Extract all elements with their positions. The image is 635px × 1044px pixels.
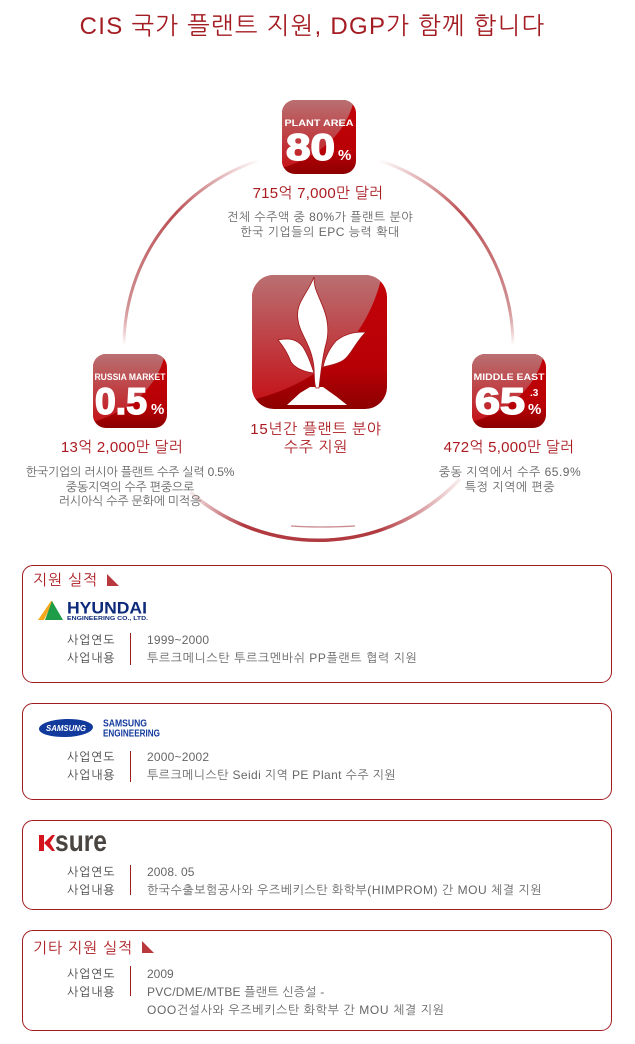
center caption: 15년간 플랜트 분야 bbox=[250, 421, 382, 438]
value: content: PVC/DME/MTBE 플랜트 신증설 - bbox=[147, 985, 324, 999]
value: year: 2009 bbox=[147, 967, 174, 981]
icon: middle east 65.3% badge: MIDDLE EAST bbox=[474, 372, 545, 382]
icon: middle east 65.3% badge: 65 bbox=[475, 381, 525, 422]
value: year: 2008. 05 bbox=[147, 865, 195, 879]
label: business content: 사업내용 bbox=[67, 651, 115, 665]
title: CIS 국가 플랜트 지원, DGP가 함께 합니다 bbox=[80, 13, 545, 40]
icon: russia market 0.5% badge: RUSSIA MARKET bbox=[94, 372, 166, 382]
logo: samsung: SAMSUNG bbox=[46, 724, 86, 733]
description: middle east: 특정 지역에 편중 bbox=[465, 480, 555, 494]
icon: middle east 65.3% badge bbox=[472, 354, 546, 428]
value: content: 한국수출보험공사와 우즈베키스탄 화학부(HIMPROM) 간 MOU 체결 지원 bbox=[147, 883, 542, 897]
value: year: 2000~2002 bbox=[147, 750, 209, 764]
icon: plant area 80% badge: PLANT AREA bbox=[284, 118, 354, 129]
description: russia: 러시아식 수주 문화에 미적응 bbox=[59, 494, 201, 508]
amount: plant area: 715억 7,000만 달러 bbox=[253, 185, 383, 202]
logo: samsung: SAMSUNG bbox=[103, 718, 147, 730]
amount: russia: 13억 2,000만 달러 bbox=[61, 439, 183, 456]
description: russia: 한국기업의 러시아 플랜트 수주 실력 0.5% bbox=[26, 465, 234, 479]
label: business year: 사업연도 bbox=[67, 633, 115, 647]
panel: other support record bbox=[22, 930, 612, 1031]
label: business content: 사업내용 bbox=[67, 985, 115, 999]
heading: support record: 지원 실적 bbox=[33, 572, 98, 589]
icon: heading triangle bbox=[107, 574, 119, 586]
icon: plant area 80% badge bbox=[282, 100, 356, 174]
value: content: 투르크메니스탄 투르크멘바쉬 PP플랜트 협력 지원 bbox=[147, 651, 418, 665]
logo: ksure bbox=[39, 825, 107, 858]
icon: plant area 80% badge: % bbox=[338, 147, 351, 164]
ring connecting the three markets bbox=[122, 161, 514, 542]
label: business year: 사업연도 bbox=[67, 865, 115, 879]
icon: russia market 0.5% badge bbox=[93, 354, 167, 428]
heading: other support record: 기타 지원 실적 bbox=[33, 940, 133, 957]
label: business content: 사업내용 bbox=[67, 768, 115, 782]
label: business year: 사업연도 bbox=[67, 967, 115, 981]
logo: ksure: sure bbox=[55, 825, 107, 858]
description: plant area bbox=[227, 210, 413, 238]
icon: middle east 65.3% badge: .3 bbox=[530, 388, 539, 399]
logo: samsung bbox=[39, 718, 160, 740]
panel: hyundai support record bbox=[22, 565, 612, 683]
value: content: 투르크메니스탄 Seidi 지역 PE Plant 수주 지원 bbox=[147, 768, 396, 782]
icon: central plant sprout bbox=[252, 275, 387, 409]
icon: russia market 0.5% badge: % bbox=[151, 401, 164, 418]
description: plant area: 한국 기업들의 EPC 능력 확대 bbox=[240, 224, 400, 238]
description: russia bbox=[26, 465, 234, 508]
description: middle east: 중동 지역에서 수주 65.9% bbox=[439, 465, 581, 479]
panel: samsung support record bbox=[22, 703, 612, 800]
logo: hyundai: HYUNDAI bbox=[67, 598, 147, 618]
icon: russia market 0.5% badge: 0.5 bbox=[95, 381, 147, 422]
center caption bbox=[250, 421, 382, 456]
value: content bbox=[147, 985, 445, 1017]
icon: plant area 80% badge: 80 bbox=[286, 127, 335, 168]
icon: heading triangle bbox=[142, 941, 154, 953]
label: business year: 사업연도 bbox=[67, 750, 115, 764]
center caption: 수주 지원 bbox=[284, 439, 348, 456]
description: middle east bbox=[439, 465, 581, 494]
label: business content: 사업내용 bbox=[67, 883, 115, 897]
logo: hyundai bbox=[38, 598, 149, 622]
value: year: 1999~2000 bbox=[147, 633, 209, 647]
logo: samsung: ENGINEERING bbox=[103, 728, 160, 740]
value: content: OOO건설사와 우즈베키스탄 화학부 간 MOU 체결 지원 bbox=[147, 1003, 445, 1017]
description: russia: 중동지역의 수주 편중으로 bbox=[66, 480, 194, 494]
logo: hyundai: ENGINEERING CO., LTD. bbox=[67, 616, 149, 622]
amount: middle east: 472억 5,000만 달러 bbox=[444, 439, 574, 456]
panel: ksure support record bbox=[22, 820, 612, 910]
icon: middle east 65.3% badge: % bbox=[528, 401, 541, 418]
description: plant area: 전체 수주액 중 80%가 플랜트 분야 bbox=[227, 210, 413, 224]
